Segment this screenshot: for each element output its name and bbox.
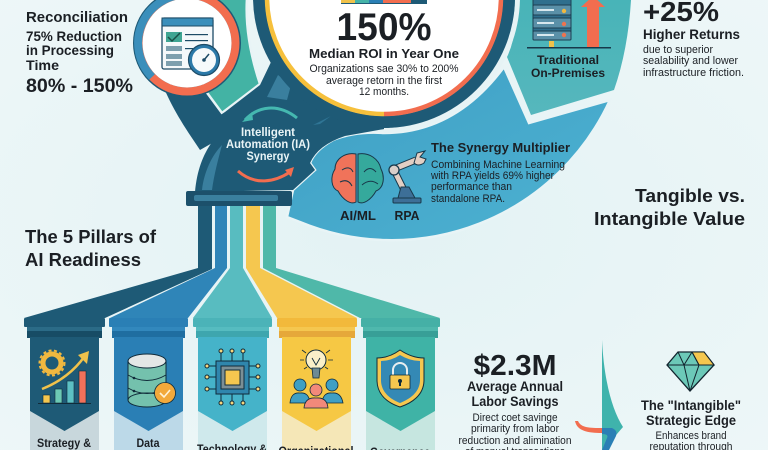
icon: window and stopwatch — [162, 18, 220, 76]
icon: diamond — [667, 352, 714, 391]
text: labor savings: reduction and alimination — [458, 435, 572, 447]
heading: 5 pillars of AI readiness: AI Readiness — [25, 249, 141, 270]
panel: pillar strategy — [24, 318, 105, 450]
icon: microchip — [205, 349, 260, 405]
text: higher returns: Higher Returns — [643, 26, 740, 42]
text: ROI description: Organizations sae 30% to 200% — [310, 63, 459, 75]
text: median ROI label: Median ROI in Year One — [309, 46, 459, 61]
divider arrow: teal blade with orange and blue ribbons — [575, 340, 623, 450]
icon: gear and growth chart — [38, 350, 91, 404]
text: ROI description — [310, 63, 459, 98]
panel: reconciliation teal swoosh — [185, 0, 260, 113]
icon: shield and lock — [377, 350, 424, 407]
text: intangible strategic edge: Strategic Edge — [646, 412, 736, 428]
text: reconciliation stats: Time — [26, 57, 59, 73]
text: synergy multiplier: standalone RPA. — [431, 193, 505, 205]
heading: 5 pillars of AI readiness — [25, 226, 157, 270]
panel: pillar technology — [193, 318, 272, 450]
text: reconciliation stats — [26, 10, 133, 97]
panel: synergy multiplier sector — [287, 67, 610, 240]
text: reconciliation stats: Reconciliation — [26, 10, 128, 26]
text: synergy multiplier: Combining Machine Learning — [431, 159, 565, 171]
text: synergy multiplier — [430, 140, 570, 205]
text: reconciliation stats: in Processing — [26, 42, 114, 58]
icon: rising orange arrow — [581, 0, 605, 47]
text: higher returns: due to superior — [643, 44, 713, 56]
heading: tangible vs intangible value: Intangible Value — [594, 208, 745, 229]
label: traditional on-premises: On-Premises — [531, 66, 605, 80]
label: AI/ML: AI/ML — [340, 209, 376, 223]
connector stems and flares to pillars — [24, 204, 440, 318]
icon: robot arm RPA — [389, 151, 426, 203]
panel: pillar governance — [361, 318, 440, 450]
label: RPA: RPA — [394, 209, 420, 223]
text: labor savings: primarity from labor — [471, 423, 559, 435]
text: synergy multiplier: with RPA yields 69% higher — [430, 170, 554, 182]
text: synergy multiplier: The Synergy Multiplier — [431, 140, 570, 155]
small bars above the figure — [341, 0, 427, 4]
text: hub label: Synergy — [246, 151, 290, 163]
icon: database with check — [128, 354, 176, 407]
hub base bar — [186, 191, 292, 206]
label: data: Data — [136, 438, 160, 450]
heading: tangible vs intangible value — [594, 185, 745, 229]
text: labor savings: Average Annual — [467, 378, 563, 394]
text: hub label: Intelligent — [241, 127, 295, 139]
panel: cloud vs on-premises sector — [507, 0, 631, 115]
text: hub label: Automation (IA) — [226, 139, 310, 151]
label: traditional on-premises — [531, 53, 605, 80]
text: labor savings: $2.3M — [474, 350, 556, 382]
label: traditional on-premises: Traditional — [537, 53, 599, 67]
label: strategy: Strategy & — [37, 438, 91, 450]
text: ROI description: 12 months. — [359, 86, 409, 98]
arrow: teal synergy arrow — [245, 108, 297, 120]
arrow: orange synergy arrow — [238, 171, 290, 181]
text: higher returns: infrastructure friction. — [643, 67, 744, 79]
icon: lightbulb and team — [290, 350, 343, 408]
text: labor savings: Direct coet savinge — [472, 412, 558, 424]
dark swoosh behind the reconciliation circle — [160, 80, 225, 150]
panel: pillar organizational — [277, 318, 357, 450]
text: reconciliation stats: 80% - 150% — [26, 76, 133, 97]
text: 150% figure: 150% — [336, 6, 432, 49]
text: labor savings: Labor Savings — [472, 393, 559, 409]
text: intangible strategic edge — [641, 397, 741, 450]
text: synergy multiplier: performance than — [431, 181, 512, 193]
text: hub label — [226, 127, 310, 163]
panel: median ROI circle — [253, 0, 518, 130]
text: reconciliation stats: 75% Reduction — [26, 28, 122, 44]
panel: reconciliation icon circle — [133, 0, 241, 97]
panel: intelligent automation hub — [195, 60, 390, 192]
heading: tangible vs intangible value: Tangible vs. — [635, 185, 745, 206]
text: labor savings — [458, 350, 572, 450]
text: intangible strategic edge: Enhances brand — [656, 430, 726, 442]
panel: pillar data — [109, 318, 188, 450]
icon: server rack — [533, 0, 571, 47]
text: ROI description: average retorn in the first — [326, 75, 442, 87]
icon: brain AI/ML — [332, 154, 383, 203]
heading: 5 pillars of AI readiness: The 5 Pillars of — [25, 226, 157, 247]
text: higher returns: sealability and lower — [643, 55, 738, 67]
text: intangible strategic edge: The "Intangible" — [641, 397, 741, 413]
text: higher returns — [643, 0, 744, 79]
